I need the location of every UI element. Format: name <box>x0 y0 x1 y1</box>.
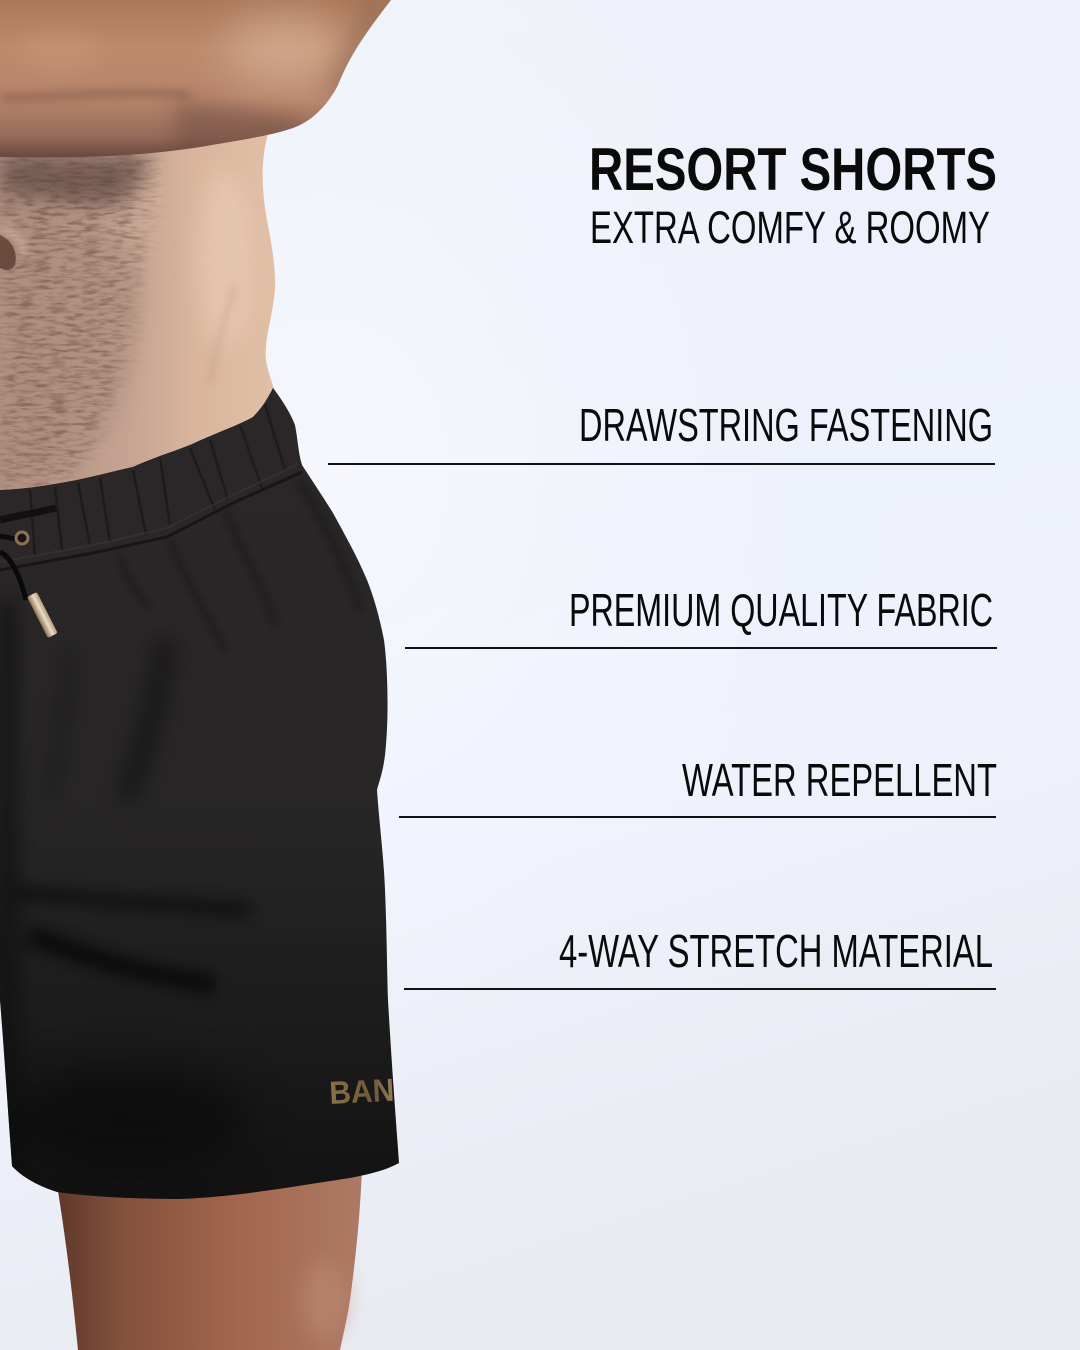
hair texture <box>0 155 160 488</box>
drawstring metal tip <box>27 592 58 638</box>
waistband <box>3 388 300 490</box>
waistband gathers <box>30 405 285 555</box>
shorts <box>0 388 418 1199</box>
lower leg <box>57 1170 362 1350</box>
navel <box>0 235 16 270</box>
drawstring <box>0 508 58 638</box>
forearm <box>0 0 395 160</box>
logo on shorts: BANG <box>328 1070 418 1111</box>
photo: model wearing black resort shorts <box>0 0 418 1350</box>
torso with chest hair <box>0 135 276 490</box>
eyelet <box>16 532 28 544</box>
fabric shading <box>7 1076 220 1152</box>
